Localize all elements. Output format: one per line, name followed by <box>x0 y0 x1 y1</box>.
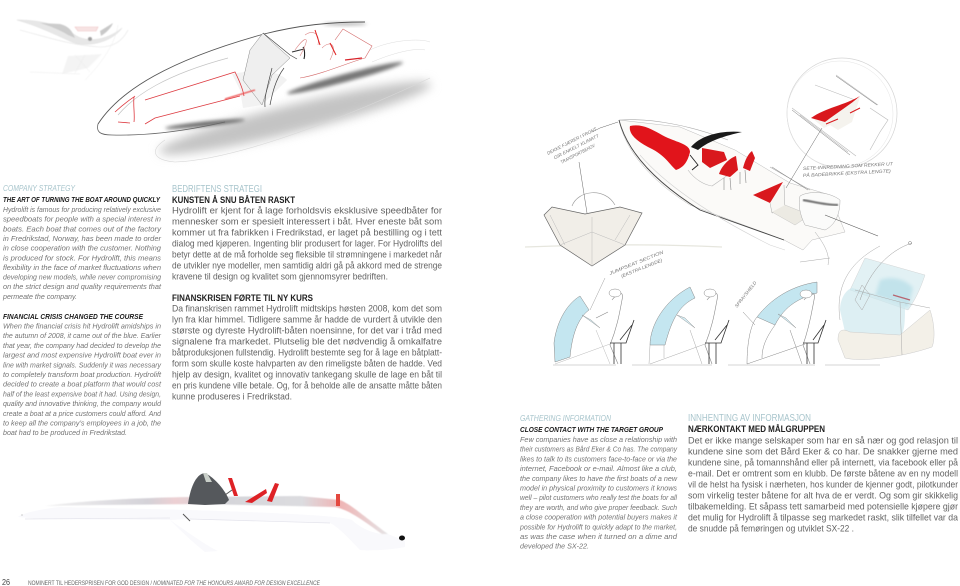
handwritten note: jump seat <box>607 249 668 283</box>
sketch: small boat front detail <box>17 20 128 80</box>
handwritten note: sprayshield: SPRAYSHIELD <box>734 280 758 309</box>
body text: dialog med kjøperen. Ingenting blir produsert for lager. For Hydrolifts del <box>172 238 442 248</box>
body text: boats. Each boat that comes out of the factory <box>3 224 162 233</box>
body text: they are worth, and who give proper feedback. Such <box>520 503 677 512</box>
handwritten note: seat <box>803 161 894 178</box>
illustration: windshield variant 1 <box>554 278 634 364</box>
heading: CLOSE CONTACT WITH THE TARGET GROUP <box>520 425 664 434</box>
body text: as was the case when it turned on a dime and <box>520 532 678 541</box>
body text: båtproduksjonen fullstendig. Hydrolift bestemte seg for å lage en båtplatt- <box>172 346 442 358</box>
heading: KUNSTEN Å SNU BÅTEN RASKT <box>172 194 295 205</box>
body text: the company likes to have the first boats of a new <box>520 474 678 483</box>
handwritten note: bow <box>546 126 605 168</box>
body text: a close cooperation with potential buyers makes it <box>520 513 678 522</box>
body text: betyr dette at de må forholde seg fleksible til strømningene i markedet når <box>172 248 442 260</box>
aft red cushion <box>753 182 783 203</box>
body text <box>172 204 442 282</box>
body text: likes to talk to its customers face-to-face or via the <box>520 454 677 463</box>
heading: THE ART OF TURNING THE BOAT AROUND QUICKLY <box>3 195 161 204</box>
sketch: main speedboat perspective <box>98 22 434 165</box>
body text: decided to create a boat platform that would cost <box>3 380 162 389</box>
text block: finanskrisen (Norwegian) <box>172 292 442 402</box>
body text: well – pilot customers who really test the boats for all <box>520 493 677 502</box>
handwritten note: jump seat: JUMPSEAT SECTION <box>607 249 665 276</box>
body text: is produced for stock. For Hydrolift, this means <box>3 253 161 262</box>
heading: NÆRKONTAKT MED MÅLGRUPPEN <box>688 423 825 434</box>
label: INNHENTING AV INFORMASJON <box>688 413 811 424</box>
body text: de utvikler nye modeller, men samtidig aldri gå på akkord med de strenge <box>172 260 442 270</box>
body text: largest and most expensive Hydrolift boat ever in <box>3 351 161 360</box>
body text: flexibility in the face of market fluctuations when <box>3 263 161 272</box>
body text: create a boat at a price customers could afford. And <box>3 409 162 418</box>
helm seats <box>719 151 755 177</box>
body text: kravene til design og kvalitet som gjennomsyrer bedriften. <box>172 270 388 282</box>
label: COMPANY STRATEGY <box>3 184 76 193</box>
body text <box>3 322 162 437</box>
outboard engine <box>799 193 840 230</box>
body text: line with market signals. Suddenly it was necessary <box>3 360 162 369</box>
body text: in Fredrikstad, Norway, has been made to order <box>3 234 161 243</box>
render: side view of boat <box>18 473 405 552</box>
ground line <box>553 364 880 366</box>
body text <box>172 302 442 402</box>
body text: permeate the company. <box>2 292 77 301</box>
body text: When the financial crisis hit Hydrolift amidships in <box>3 322 161 330</box>
body text: internet, Facebook or e-mail. Almost like a club, <box>520 464 677 473</box>
body text: developing new models, while never compromising <box>3 273 162 282</box>
body text: de snudde på femøringen og utviklet SX-22 . <box>688 522 854 534</box>
body text: kundene sine som det Bård Eker & co har. De snakker gjerne med <box>688 446 958 456</box>
body text: model in physical proximity to customers it knows <box>520 484 677 492</box>
sketch: circular seat detail <box>786 58 897 188</box>
sketch: top view of boat with red cushions <box>619 120 878 265</box>
handwritten note: jump seat: (EKSTRA LENGDE) <box>620 257 664 279</box>
body text: the autumn of 2008, it came out of the blue. Earlier <box>3 331 161 340</box>
body text: Det er ikke mange selskaper som har en så nær og god relasjon til <box>688 434 958 446</box>
label: BEDRIFTENS STRATEGI <box>172 184 262 195</box>
body text: kommer ut fra fabrikken i Fredrikstad, er laget på bestilling og i tett <box>172 226 442 238</box>
body text: to completely transform boat production. Hydrolift <box>3 370 162 379</box>
handwritten note: bow: GIR ENKELT KLIMATT <box>553 133 601 160</box>
text block: innhenting av informasjon (Norwegian) <box>688 413 959 534</box>
body text <box>2 205 162 301</box>
body text: to keep all the company’s employees in a job, the <box>3 418 161 428</box>
body text: form som skulle koste halvparten av den rimeligste båten de hadde. Ved <box>172 358 442 368</box>
body text: quality and innovative thinking, the company would <box>3 399 162 408</box>
body text: Da finanskrisen rammet Hydrolift midtskips høsten 2008, kom det som <box>172 302 442 314</box>
red strip <box>811 96 860 122</box>
body text: største og dyreste Hydrolift-båten noensinne, for det var i tråd med <box>172 324 442 336</box>
body text: Hydrolift er kjent for å lage forholdsvis eksklusive speedbåter for <box>172 204 442 216</box>
sketch: front view of boat <box>525 122 722 266</box>
text block: financial crisis (English) <box>3 312 162 437</box>
heading: FINANSKRISEN FØRTE TIL NY KURS <box>172 292 313 303</box>
body text: kunne produseres i Fredrikstad. <box>172 390 292 402</box>
handwritten note: seat: PÅ BADEBRIKKE (EKSTRA LENGTE) <box>803 167 891 178</box>
body text: their customers as Bård Eker & Co has. The company <box>520 445 678 454</box>
text block: gathering information (English) <box>519 414 678 551</box>
red trim lines <box>115 72 244 124</box>
red seats <box>228 478 279 503</box>
red bow cushion <box>630 125 690 170</box>
handwritten note: seat: SETE-INNREDNING SOM REKKER UT <box>803 161 894 171</box>
windshield <box>243 33 290 105</box>
handwritten note: bow: TRANSPORTBEHOV <box>560 143 596 165</box>
body text: in close cooperation with the customer. Nothing <box>3 244 162 253</box>
body text: on the strict design and quality requirements that <box>3 282 162 291</box>
body text: that year, the company had decided to develop the <box>3 341 161 350</box>
body text: half of the least expensive boat it had. Using design, <box>3 389 161 398</box>
body text: Few companies have as close a relationship with <box>520 435 677 444</box>
heading: FINANCIAL CRISIS CHANGED THE COURSE <box>3 312 144 321</box>
body text <box>688 434 959 534</box>
body text: mennesker som er spesielt interessert i båt. Hver eneste båt som <box>172 216 442 226</box>
console <box>188 473 229 505</box>
illustration: windshield variant 3 <box>743 282 826 364</box>
label: GATHERING INFORMATION <box>520 414 611 423</box>
body text: developed the SX-22. <box>520 542 589 551</box>
body text: boat had to be produced in Fredrikstad. <box>3 428 127 437</box>
text block: bedriftens strategi (Norwegian) <box>172 184 442 282</box>
windscreen <box>691 132 742 150</box>
illustration: windshield variant 2 <box>649 287 729 364</box>
body text: speedboats for people with a special interest in <box>3 215 161 224</box>
text block: company strategy (English) <box>2 184 162 301</box>
body text <box>519 435 678 551</box>
body text: lyn fra klar himmel. Tidligere samme år hadde de vurdert å utvikle den <box>172 314 442 324</box>
body text: en pris kundene ville betale. Og, for å beholde alle de ansatte måtte båten <box>172 380 442 390</box>
handwritten note: bow: DEKKE FJÆRER I FRONT <box>546 126 598 156</box>
body text: hjelp av design, kvalitet og innovativ tankegang skulle de lage en båt til <box>172 368 442 380</box>
sketch: windshield hull detail <box>838 242 934 360</box>
body text: signalene fra markedet. Plutselig ble det nødvendig å omkalfatre <box>172 336 442 346</box>
body text: Hydrolift is famous for producing relatively exclusive <box>3 205 161 214</box>
body text: possible for Hydrolift to quickly adapt to the market, <box>519 522 677 531</box>
